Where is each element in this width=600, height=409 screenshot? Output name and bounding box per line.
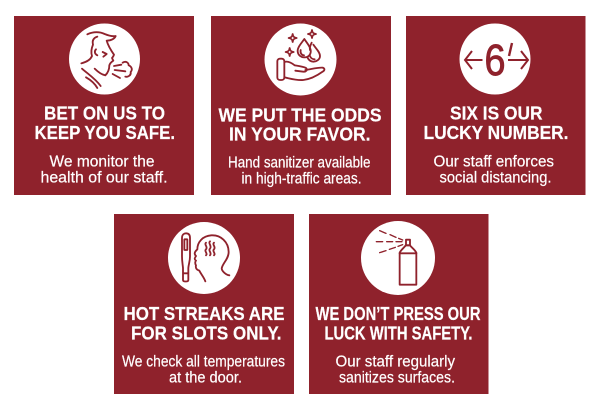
body text: We check all temperatures [122, 354, 285, 370]
panel: press our luck [309, 214, 488, 394]
icon: spray bottle [361, 221, 435, 295]
heading: IN YOUR FAVOR. [229, 124, 370, 144]
body text: Hand sanitizer available [228, 154, 370, 172]
panel: six is our lucky number [406, 16, 586, 195]
heading: WE DON’T PRESS OUR [316, 303, 480, 324]
body text: health of our staff. [40, 170, 168, 186]
icon: hand sanitizer [264, 24, 336, 96]
body text: at the door. [169, 370, 242, 386]
heading: HOT STREAKS ARE [124, 303, 284, 324]
body text: in high-traffic areas. [242, 170, 362, 188]
body text: social distancing. [440, 170, 552, 186]
heading: WE PUT THE ODDS [218, 104, 382, 126]
icon: six feet distance [460, 24, 530, 94]
heading: FOR SLOTS ONLY. [131, 322, 282, 344]
panel: hot streaks [114, 214, 294, 394]
panel: bet on us [14, 16, 194, 195]
heading: KEEP YOU SAFE. [34, 122, 175, 143]
icon: thermometer and head [168, 222, 240, 294]
body text: sanitizes surfaces. [339, 370, 455, 386]
panel: odds in your favor [211, 16, 391, 195]
icon: six feet distance: 6 [484, 36, 506, 85]
heading: LUCK WITH SAFETY. [324, 322, 472, 344]
heading: BET ON US TO [44, 102, 165, 124]
body text: We monitor the [50, 154, 154, 170]
heading: LUCKY NUMBER. [424, 122, 568, 143]
body text: Our staff regularly [336, 354, 455, 370]
icon: person coughing [69, 24, 140, 94]
heading: SIX IS OUR [450, 102, 542, 124]
body text: Our staff enforces [434, 154, 554, 170]
